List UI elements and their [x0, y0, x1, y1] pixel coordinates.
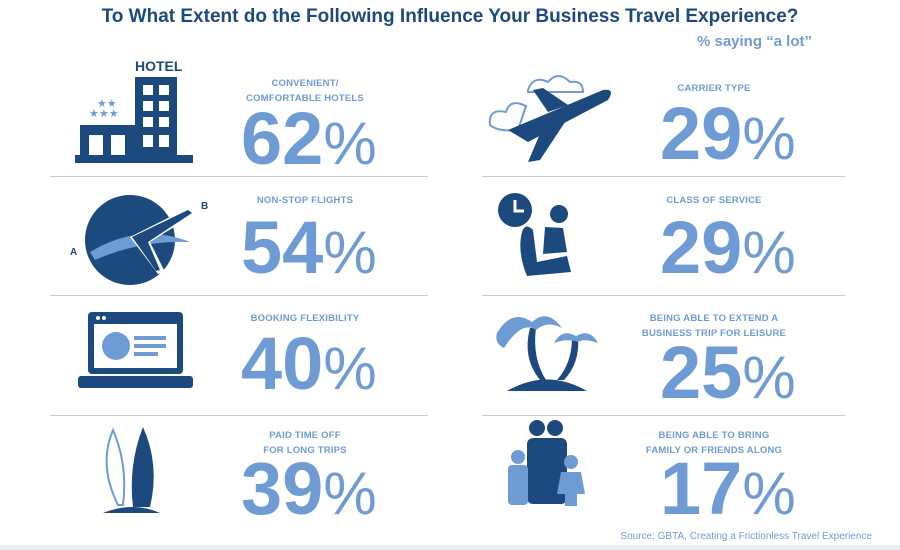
icon: laptop — [78, 312, 193, 388]
icon: globe plane — [70, 195, 208, 285]
stat: paid time off: 39% — [241, 447, 375, 530]
stat: non-stop: 54% — [241, 206, 375, 289]
stat: extend trip: BUSINESS TRIP FOR LEISURE — [642, 328, 786, 339]
stat: carrier: 29% — [660, 92, 794, 175]
stat: hotels: COMFORTABLE HOTELS — [246, 93, 364, 104]
stat: family: BEING ABLE TO BRING — [659, 430, 769, 441]
stat: family: FAMILY OR FRIENDS ALONG — [646, 445, 782, 456]
stat: class: CLASS OF SERVICE — [666, 195, 762, 206]
stat: hotels: 62% — [241, 97, 375, 180]
subtitle: % saying “a lot” — [697, 33, 812, 50]
icon: airplane clouds — [488, 75, 611, 162]
stat: booking: 40% — [241, 322, 375, 405]
stat: paid time off: PAID TIME OFF — [269, 430, 341, 441]
icon: hotel: HOTEL — [135, 58, 183, 74]
stat: family: 17% — [660, 447, 794, 530]
stat: booking: BOOKING FLEXIBILITY — [251, 313, 359, 324]
icon: palm island — [496, 316, 598, 391]
icon: globe plane: A — [70, 247, 77, 258]
icon: clock seat — [498, 193, 571, 276]
stat: class: 29% — [660, 206, 794, 289]
icon: family — [508, 420, 585, 506]
icon: hotel — [75, 58, 193, 163]
stat: extend trip: BEING ABLE TO EXTEND A — [650, 313, 778, 324]
icon: globe plane: B — [201, 201, 208, 212]
icon: hotel: ★★ — [97, 98, 117, 110]
stat: extend trip: 25% — [660, 331, 794, 414]
source: Source: GBTA, Creating a Frictionless Travel Experience — [620, 531, 872, 542]
icon: surfboards — [103, 427, 160, 513]
title: To What Extent do the Following Influence Your Business Travel Experience? — [102, 6, 798, 27]
stat: hotels: CONVENIENT/ — [271, 78, 339, 89]
stat: carrier: CARRIER TYPE — [677, 83, 751, 94]
icon: hotel: ★★★ — [89, 108, 119, 120]
stat: non-stop: NON-STOP FLIGHTS — [257, 195, 353, 206]
stat: paid time off: FOR LONG TRIPS — [263, 445, 347, 456]
